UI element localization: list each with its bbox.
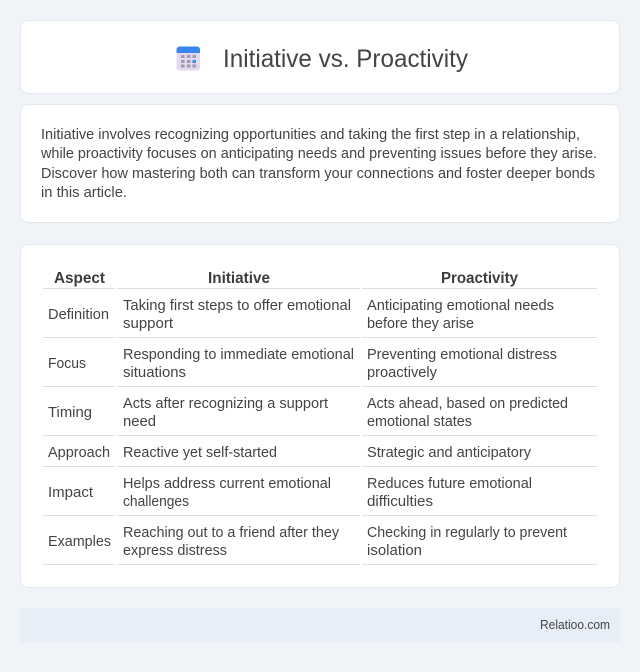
table header: Proactivity — [441, 270, 518, 287]
intro text: in this article. — [41, 185, 127, 201]
row: timing: Acts ahead, based on predicted — [367, 396, 568, 412]
table header — [54, 270, 518, 287]
row: timing: Acts after recognizing a support — [123, 396, 328, 412]
row: approach: Strategic and anticipatory — [367, 445, 532, 461]
row: impact: Helps address current emotional — [123, 476, 331, 492]
row: impact: Reduces future emotional — [367, 476, 532, 492]
row: focus: Focus — [48, 356, 86, 372]
row: definition: before they arise — [367, 316, 474, 332]
panel: title — [20, 20, 620, 94]
intro text: Initiative involves recognizing opportunities and taking the first step in a relationship, — [41, 127, 580, 143]
row: timing: need — [123, 414, 156, 430]
row: approach — [48, 445, 532, 461]
row: impact: difficulties — [367, 494, 433, 510]
panel: introduction — [20, 104, 620, 222]
icon: calendar — [176, 46, 200, 70]
row: definition: Taking first steps to offer emotional — [123, 298, 351, 314]
row: timing: Timing — [48, 405, 92, 421]
row: approach: Reactive yet self-started — [123, 445, 277, 461]
row: examples: Checking in regularly to prevent — [367, 525, 567, 541]
row: focus: proactively — [367, 365, 438, 381]
row: definition: Definition — [48, 307, 109, 323]
row: examples: Reaching out to a friend after they — [123, 525, 340, 541]
row: approach: Approach — [48, 445, 110, 461]
row: focus: situations — [123, 365, 186, 381]
intro text — [40, 127, 597, 201]
row: definition: Anticipating emotional needs — [367, 298, 554, 314]
title: Initiative vs. Proactivity — [223, 45, 468, 73]
row: timing — [48, 396, 568, 430]
table header: Aspect — [54, 270, 105, 287]
table rules — [43, 288, 597, 565]
row: impact — [48, 476, 532, 510]
table header: Initiative — [208, 270, 270, 287]
intro text: Discover how mastering both can transform your connections and foster deeper bonds — [41, 166, 595, 182]
footer credit: Relatioo.com — [540, 618, 610, 632]
row: focus: Responding to immediate emotional — [123, 347, 354, 363]
row: examples: Examples — [48, 534, 111, 550]
row: impact: challenges — [123, 494, 189, 510]
panel: comparison table — [20, 244, 620, 588]
row: definition — [48, 298, 554, 332]
row: definition: support — [123, 316, 173, 332]
row: examples: isolation — [367, 543, 422, 559]
intro text: while proactivity focuses on anticipating needs and preventing issues before they arise. — [40, 146, 597, 162]
row: examples: express distress — [123, 543, 227, 559]
row: focus: Preventing emotional distress — [367, 347, 557, 363]
row: impact: Impact — [48, 485, 93, 501]
row: examples — [48, 525, 567, 559]
row: timing: emotional states — [367, 414, 472, 430]
row: focus — [48, 347, 557, 381]
footer — [20, 608, 620, 642]
